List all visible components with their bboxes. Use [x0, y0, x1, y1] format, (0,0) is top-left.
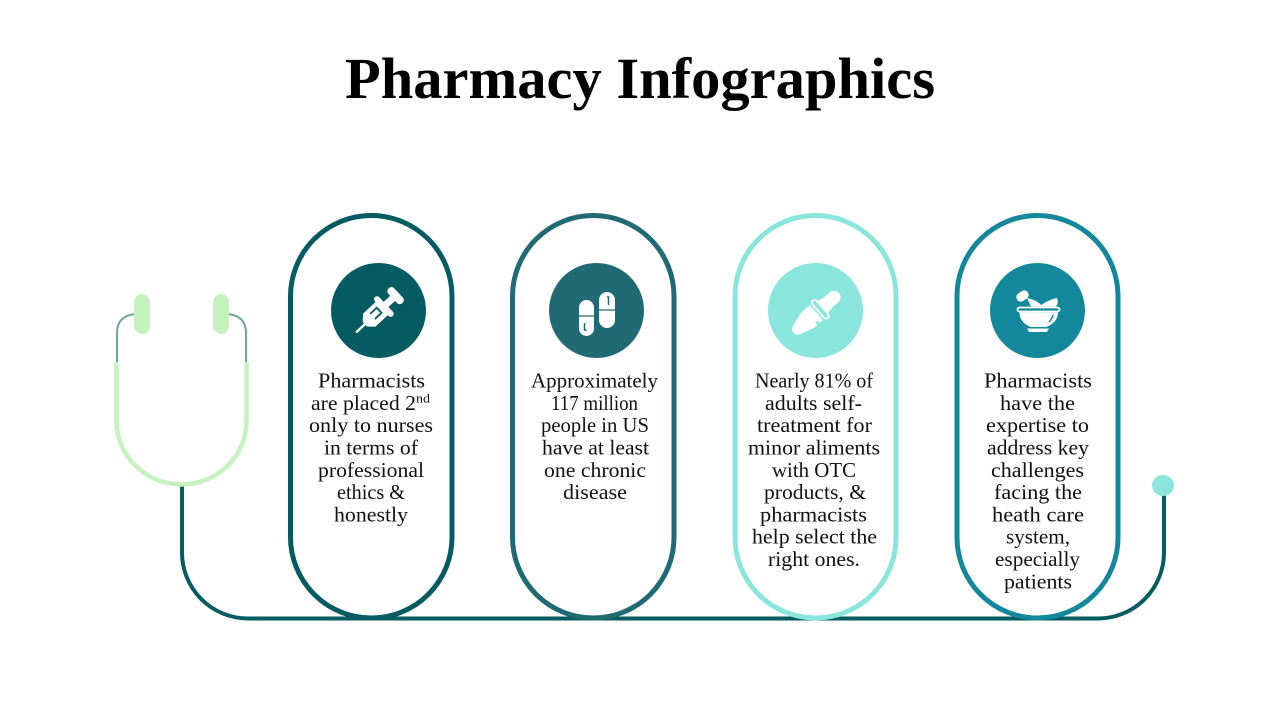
card 1 outline	[290, 216, 452, 618]
card 1: pharmacists rank	[290, 216, 452, 618]
card 4 text: have the	[1000, 391, 1075, 415]
card 4 text: heath care	[992, 502, 1084, 526]
icon: mortar and pestle	[990, 263, 1085, 358]
card 3 text: pharmacists	[760, 502, 867, 526]
card 4 text: facing the	[994, 480, 1082, 504]
card 3 text: right ones.	[768, 547, 860, 571]
U-shaped binaural	[116, 362, 246, 484]
card 2 text	[531, 368, 658, 504]
ear tubes	[117, 314, 246, 362]
card 4 text: challenges	[991, 458, 1084, 482]
card 4 text: Pharmacists	[984, 368, 1092, 392]
card 2 text: disease	[563, 480, 627, 504]
card 3 text: adults self-	[765, 391, 862, 415]
card 4: expertise	[957, 216, 1118, 618]
card 3 text: Nearly 81% of	[755, 368, 873, 392]
card 2 text: people in US	[541, 413, 649, 437]
card 2 text: one chronic	[544, 458, 646, 482]
card 3 text: with OTC	[772, 458, 856, 482]
card 1 text	[309, 368, 433, 526]
card 3 text: products, &	[764, 480, 866, 504]
card 3: self-treatment	[735, 216, 896, 618]
card 2: chronic disease	[512, 216, 674, 618]
card 4 text: patients	[1004, 569, 1072, 593]
card 1 text: only to nurses	[309, 413, 433, 437]
card 2 outline	[512, 216, 674, 618]
card 4 text: system,	[1006, 525, 1070, 549]
icon: syringe	[331, 263, 426, 358]
card 4 text	[984, 368, 1092, 593]
card 1 text: in terms of	[324, 436, 418, 460]
card 2 text: have at least	[542, 436, 649, 460]
card 3 text: minor aliments	[748, 436, 880, 460]
card 1 text: professional	[318, 458, 424, 482]
stethoscope headset	[116, 294, 246, 484]
card 3 outline	[735, 216, 896, 618]
card 1 text: ethics &	[337, 480, 405, 504]
card 4 text: especially	[995, 547, 1080, 571]
card 1 text: honestly	[334, 502, 409, 526]
card 4 text: address key	[987, 436, 1090, 460]
card 3 text: help select the	[752, 525, 877, 549]
card 4 outline	[957, 216, 1118, 618]
card 2 text: 117 million	[551, 391, 638, 415]
right earpiece	[213, 294, 229, 334]
card 1 text: are placed 2	[311, 391, 416, 415]
icon: dropper	[768, 263, 863, 358]
left earpiece	[134, 294, 150, 334]
card 2 text: Approximately	[531, 368, 658, 392]
card 3 text: treatment for	[757, 413, 872, 437]
card 1 text: Pharmacists	[318, 368, 425, 392]
card 1 text: nd	[416, 390, 431, 406]
card 3 text	[748, 368, 880, 571]
title: Pharmacy Infographics	[345, 46, 935, 111]
stethoscope end dot	[1152, 475, 1174, 496]
card 4 text: expertise to	[986, 413, 1089, 437]
icon: capsules	[549, 263, 644, 358]
stethoscope tube	[182, 486, 1164, 618]
